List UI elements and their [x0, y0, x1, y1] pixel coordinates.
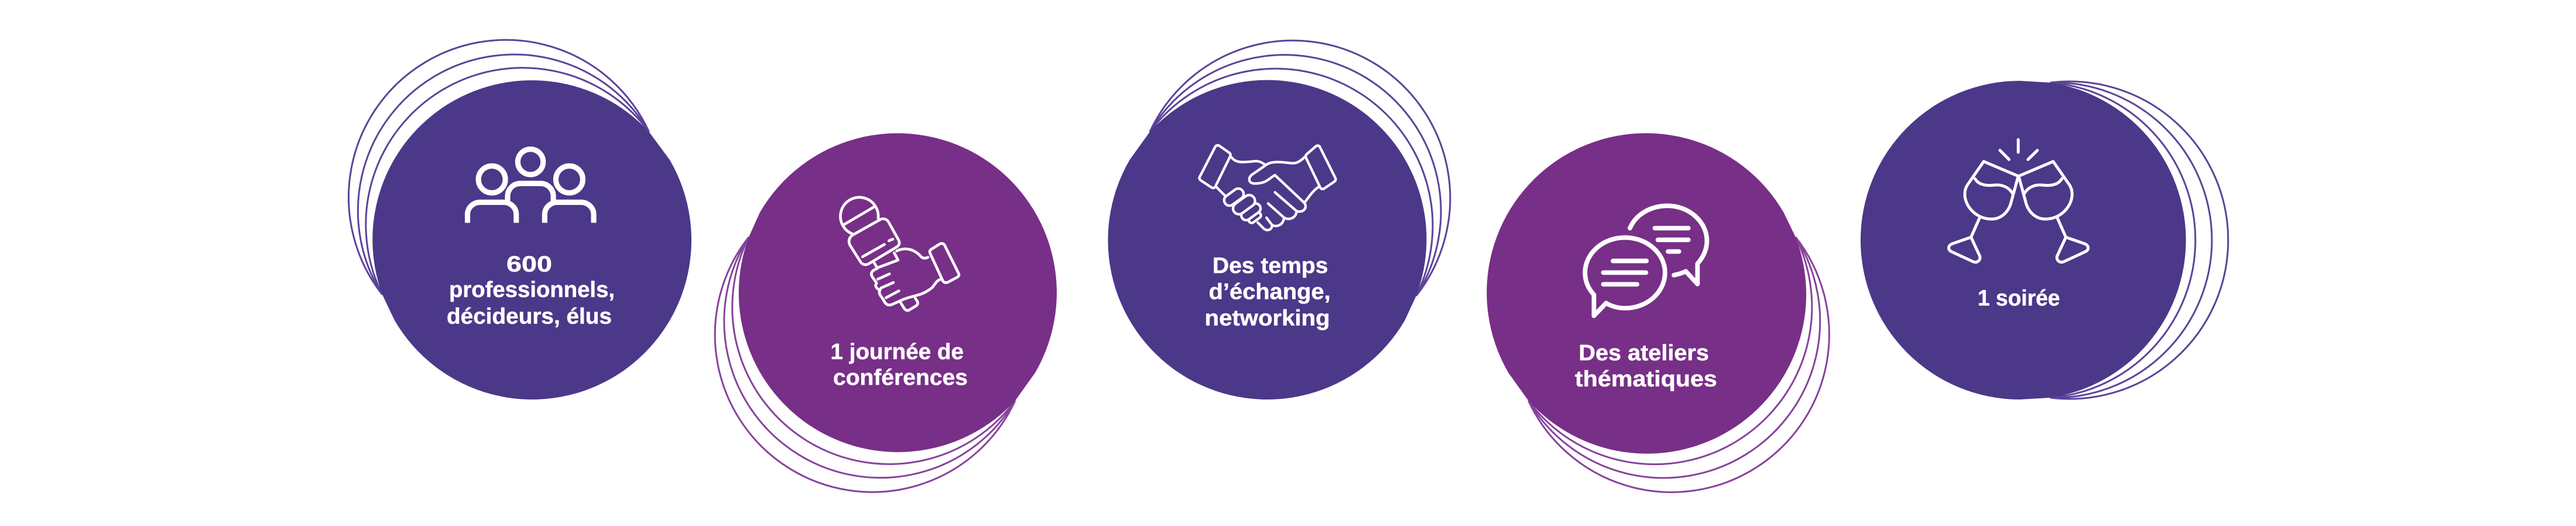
icon: group of people: [468, 149, 594, 223]
outline rings 3: [1150, 40, 1450, 296]
panel: ateliers thématiques: [1486, 133, 1829, 492]
panel: temps d'échange: [1108, 40, 1450, 399]
disc 3: [1108, 80, 1427, 399]
text: Des temps d'échange, networking: [1205, 254, 1331, 331]
disc 2: [739, 133, 1057, 452]
text: 600 professionnels, décideurs, élus: 600: [506, 252, 552, 277]
outline rings 5: [2050, 81, 2228, 399]
text: Des ateliers thématiques: thématiques: [1575, 367, 1717, 392]
icon: handshake: [1200, 145, 1335, 230]
panel: 1 journée de conférences: [715, 133, 1057, 492]
text: Des temps d'échange, networking: d’échange,: [1209, 280, 1331, 305]
text: 1 journée de conférences: [830, 340, 968, 390]
disc 1: [372, 80, 691, 399]
text: 600 professionnels, décideurs, élus: professionnels,: [449, 278, 615, 302]
text: Des temps d'échange, networking: networking: [1205, 306, 1330, 331]
panel: 600 professionnels: [349, 40, 691, 399]
disc 4: [1486, 133, 1806, 454]
icon: clinking wine glasses: [1949, 139, 2088, 262]
text: Des ateliers thématiques: Des ateliers: [1578, 341, 1709, 366]
text: 600 professionnels, décideurs, élus: décideurs, élus: [447, 305, 612, 329]
text: 1 journée de conférences: conférences: [833, 366, 968, 390]
outline rings 4: [1529, 237, 1829, 492]
text: 1 journée de conférences: 1 journée de: [830, 340, 964, 364]
outline rings 2: [715, 237, 1015, 492]
text: 1 soirée: 1 soirée: [1978, 286, 2060, 311]
text: 600 professionnels, décideurs, élus: [447, 252, 615, 329]
text: Des temps d'échange, networking: Des temps: [1212, 254, 1328, 278]
disc 5: [1861, 81, 2186, 399]
icon: speech bubbles: [1585, 206, 1707, 316]
icon: hand holding microphone: [841, 197, 959, 310]
panel: 1 soirée: [1861, 81, 2228, 399]
outline rings 1: [349, 40, 649, 295]
text: Des ateliers thématiques: [1575, 341, 1717, 392]
